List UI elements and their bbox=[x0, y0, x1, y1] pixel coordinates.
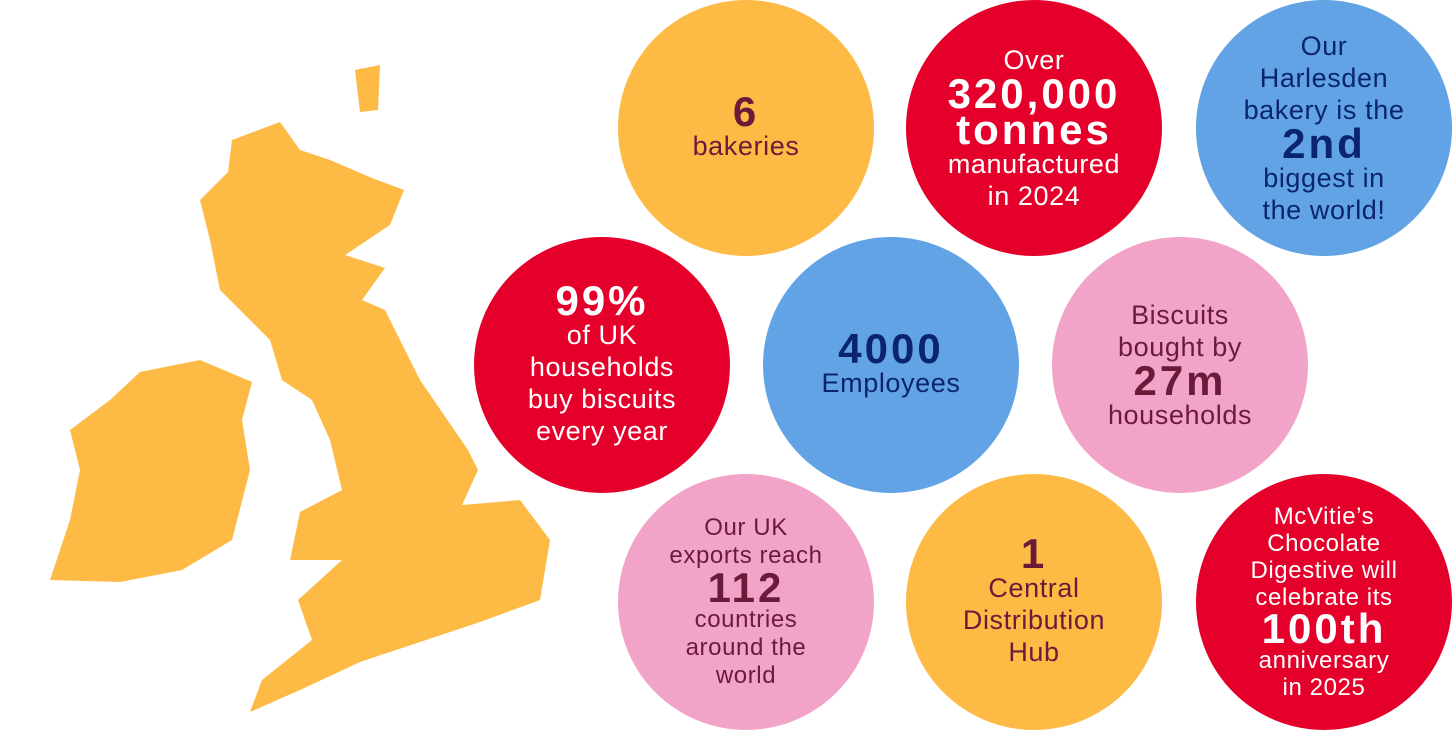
circle: 4000 employees: Employees bbox=[822, 368, 960, 398]
circle: Harlesden: 2nd bbox=[1282, 120, 1366, 167]
circle: 27m households: 27m bbox=[1133, 357, 1227, 404]
circle: 4000 employees: 4000 bbox=[838, 325, 944, 372]
circle: Harlesden bbox=[1196, 0, 1452, 256]
circle: 100th anniversary bbox=[1196, 474, 1452, 730]
circle: 320,000 tonnes bbox=[906, 0, 1162, 256]
circle: 112 countries: 112 bbox=[708, 564, 784, 611]
circle: 27m households: Biscuits bbox=[1131, 300, 1229, 330]
map: UK and Ireland bbox=[50, 65, 550, 712]
circle: 27m households: bought by households bbox=[1108, 332, 1252, 430]
circle: 6 bakeries bbox=[618, 0, 874, 256]
Ireland bbox=[50, 360, 252, 582]
Great Britain bbox=[200, 122, 550, 712]
circle: distribution hub: Distribution bbox=[963, 605, 1105, 635]
circle: distribution hub: Central bbox=[988, 573, 1080, 603]
circle: Harlesden: Our bbox=[1301, 31, 1347, 61]
circle: 100th anniversary: celebrate its anniversary bbox=[1255, 584, 1393, 674]
circle: distribution hub bbox=[906, 474, 1162, 730]
circle: 112 countries bbox=[618, 474, 874, 730]
circle: 4000 employees bbox=[763, 237, 1019, 493]
circle: 320,000 tonnes: in 2024 bbox=[988, 181, 1080, 211]
circle: 100th anniversary: in 2025 bbox=[1283, 674, 1365, 701]
circle: 112 countries: countries bbox=[695, 606, 797, 633]
circle: 99%: of UK bbox=[567, 320, 637, 350]
circle: 100th anniversary: Chocolate bbox=[1267, 530, 1381, 557]
circle: Harlesden: the world! bbox=[1262, 195, 1386, 225]
circle: 112 countries: Our UK bbox=[704, 514, 788, 541]
circle: 99%: every year bbox=[536, 416, 668, 446]
circle: 100th anniversary: 100th bbox=[1262, 605, 1386, 652]
circle: 99%: buy biscuits bbox=[528, 384, 676, 414]
circle: 112 countries: exports reach bbox=[669, 542, 823, 569]
circle: 100th anniversary: Digestive will bbox=[1250, 557, 1398, 584]
circle: 100th anniversary: McVitie’s bbox=[1274, 503, 1374, 530]
circle: 320,000 tonnes: tonnes bbox=[956, 106, 1112, 153]
circle: 99% bbox=[474, 237, 730, 493]
circle: Harlesden: bakery is the biggest in bbox=[1244, 95, 1404, 193]
Orkney/Shetland bbox=[355, 65, 380, 112]
circle: 6 bakeries: bakeries bbox=[693, 131, 799, 161]
circle: 6 bakeries: 6 bbox=[733, 88, 759, 135]
circle: 112 countries: around the bbox=[686, 634, 806, 661]
circle: 99%: 99% bbox=[555, 277, 649, 324]
circle: Harlesden: Harlesden bbox=[1260, 63, 1388, 93]
circle: 27m households bbox=[1052, 237, 1308, 493]
circle: 99%: households bbox=[530, 352, 674, 382]
circle: 112 countries: world bbox=[716, 662, 776, 689]
circle: distribution hub: Hub bbox=[1008, 637, 1060, 667]
circle: 320,000 tonnes: 320,000 bbox=[948, 70, 1120, 117]
circle: 320,000 tonnes: Over manufactured bbox=[948, 45, 1120, 179]
circle: distribution hub: 1 bbox=[1021, 530, 1047, 577]
